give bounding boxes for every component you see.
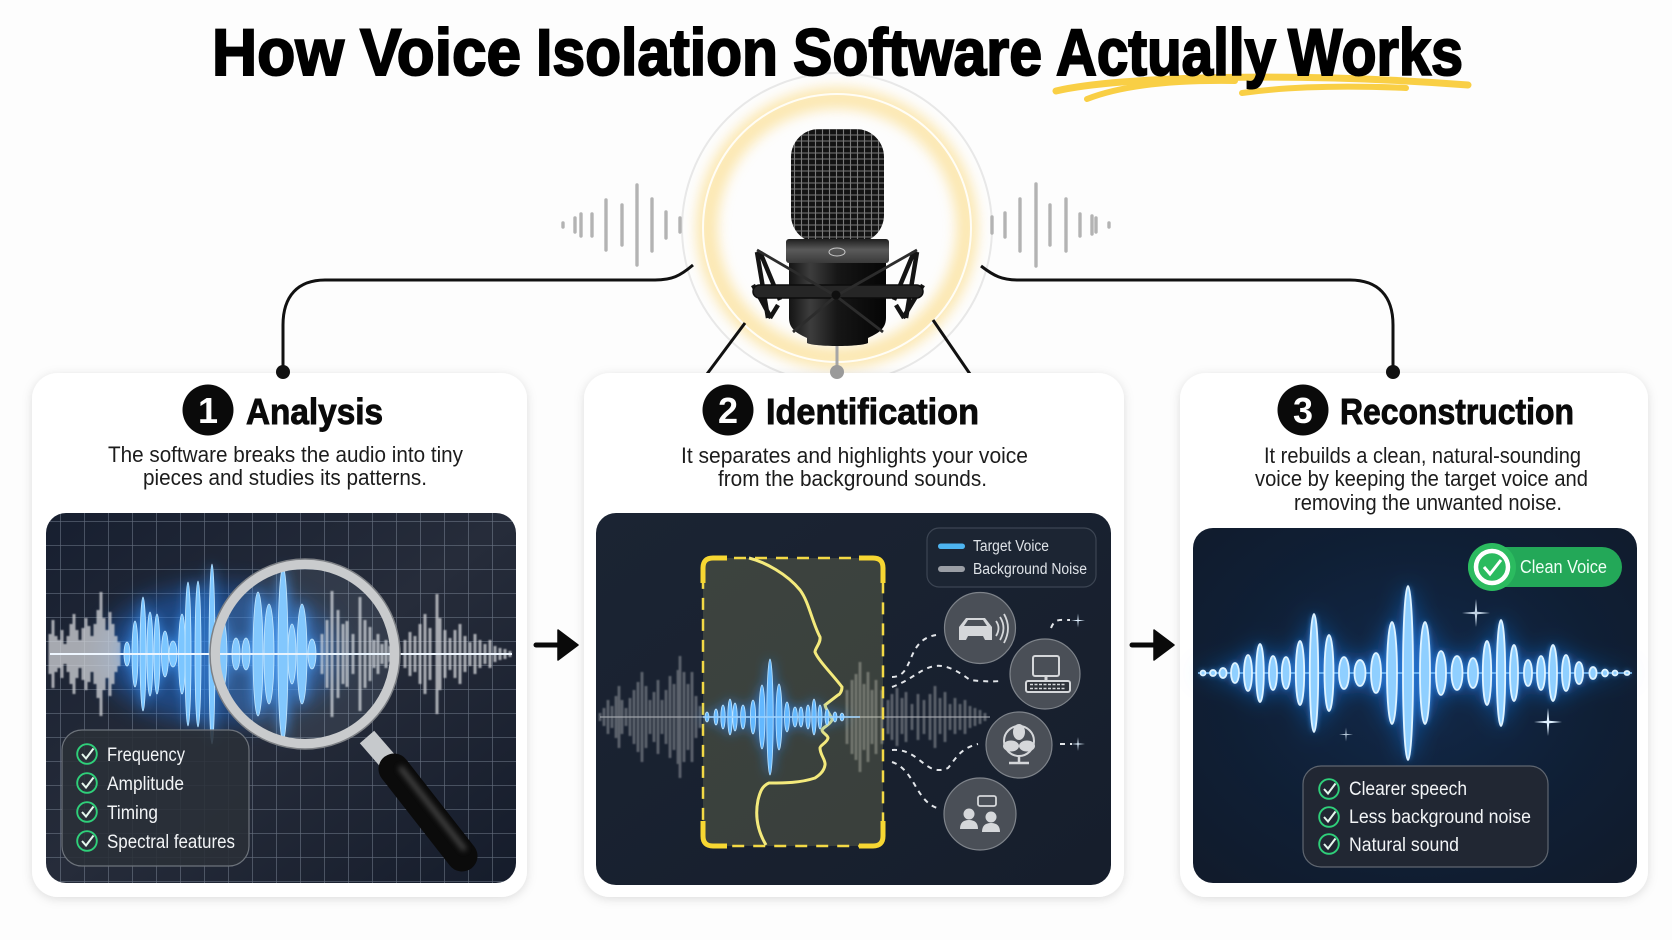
shock mount ring	[753, 285, 923, 298]
step number 2	[702, 384, 754, 436]
legend	[927, 528, 1096, 587]
microphone	[753, 129, 923, 346]
waveform	[1198, 586, 1632, 760]
description	[1255, 443, 1588, 515]
card 2: Identification	[584, 373, 1124, 897]
cross wires	[757, 250, 917, 332]
checklist: results	[1303, 766, 1548, 867]
blue waveform	[124, 564, 316, 744]
item: Timing: Timing	[107, 803, 158, 824]
description: It rebuilds a clean, natural-sounding	[1264, 443, 1581, 468]
item: Amplitude	[77, 773, 184, 795]
right sound wave	[992, 184, 1109, 266]
description: The software breaks the audio into tiny	[108, 442, 463, 467]
mic body	[789, 263, 886, 346]
blue glow	[100, 584, 340, 724]
center line	[600, 716, 990, 718]
lens	[219, 568, 391, 740]
description	[108, 442, 463, 490]
card 3: Reconstruction	[1180, 373, 1648, 897]
checklist: analysis features	[62, 730, 249, 866]
icon: computer noise	[1010, 639, 1080, 709]
step number 3: 3	[1293, 390, 1313, 431]
magnifying glass	[210, 559, 465, 856]
item: Amplitude: Amplitude	[107, 774, 184, 795]
legend item: Target Voice	[938, 538, 1049, 555]
head silhouette	[749, 558, 842, 845]
center connector stem	[836, 346, 838, 372]
item: Spectral features: Spectral features	[107, 832, 235, 853]
title: Works	[1288, 15, 1463, 89]
step number 1: 1	[198, 390, 218, 431]
handle collar	[367, 737, 387, 760]
mic grille	[791, 129, 884, 243]
title: Voice	[360, 15, 521, 89]
arrow: step 1 to step 2	[536, 630, 578, 660]
handle	[394, 769, 462, 856]
description: from the background sounds.	[718, 466, 987, 491]
item: Less background noise: Less background noise	[1349, 807, 1531, 828]
step number 3	[1278, 384, 1328, 436]
description: voice by keeping the target voice and	[1255, 466, 1588, 491]
heading: Reconstruction: Reconstruction	[1340, 391, 1574, 432]
item: Clearer speech: Clearer speech	[1349, 779, 1467, 800]
icon: car noise	[944, 592, 1016, 664]
title underline: yellow brush strokes	[1056, 77, 1468, 99]
icon: fan noise	[986, 712, 1052, 778]
title	[212, 15, 1463, 89]
description: pieces and studies its patterns.	[143, 465, 427, 490]
title: Isolation	[536, 15, 778, 89]
panel: clean waveform	[1193, 528, 1637, 883]
center line	[50, 653, 512, 655]
gray waveform	[50, 591, 510, 717]
mic collar	[786, 239, 889, 263]
gray noise waveform	[600, 656, 985, 778]
dashed noise paths	[892, 620, 1072, 808]
heading: Analysis: Analysis	[246, 391, 383, 432]
title: Actually	[1056, 15, 1276, 89]
item: Frequency	[77, 744, 185, 766]
item: Natural sound: Natural sound	[1349, 835, 1459, 856]
microphone halo rings	[682, 73, 992, 383]
description: It separates and highlights your voice	[681, 443, 1028, 468]
mic badge	[829, 248, 845, 256]
badge: Clean Voice	[1468, 543, 1622, 591]
card 1: Analysis	[32, 373, 527, 897]
arrow: step 2 to step 3	[1132, 630, 1174, 660]
step number 1	[182, 384, 234, 436]
sparkles	[1071, 614, 1085, 751]
icon: people talking noise	[944, 778, 1016, 850]
title: How	[212, 15, 345, 89]
step number 2: 2	[718, 390, 738, 431]
description	[681, 443, 1028, 491]
legend item: Target Voice: Target Voice	[973, 538, 1049, 555]
title: Software	[793, 15, 1042, 89]
heading: Identification: Identification	[766, 391, 979, 432]
item: Frequency: Frequency	[107, 745, 185, 766]
left sound wave	[563, 185, 680, 265]
connector lines from microphone to cards	[283, 265, 1393, 374]
panel: voice separation	[596, 513, 1111, 885]
item: Timing	[77, 802, 158, 824]
shock mount rear struts	[753, 252, 923, 318]
blue voice waveform	[703, 659, 860, 775]
legend item: Background Noise: Background Noise	[973, 561, 1087, 578]
sparkles	[1339, 599, 1562, 742]
badge: Clean Voice: Clean Voice	[1520, 557, 1607, 577]
panel: waveform under magnifier	[46, 513, 516, 883]
description: removing the unwanted noise.	[1294, 490, 1562, 515]
connector dots	[276, 365, 1400, 379]
selection box	[703, 558, 883, 846]
